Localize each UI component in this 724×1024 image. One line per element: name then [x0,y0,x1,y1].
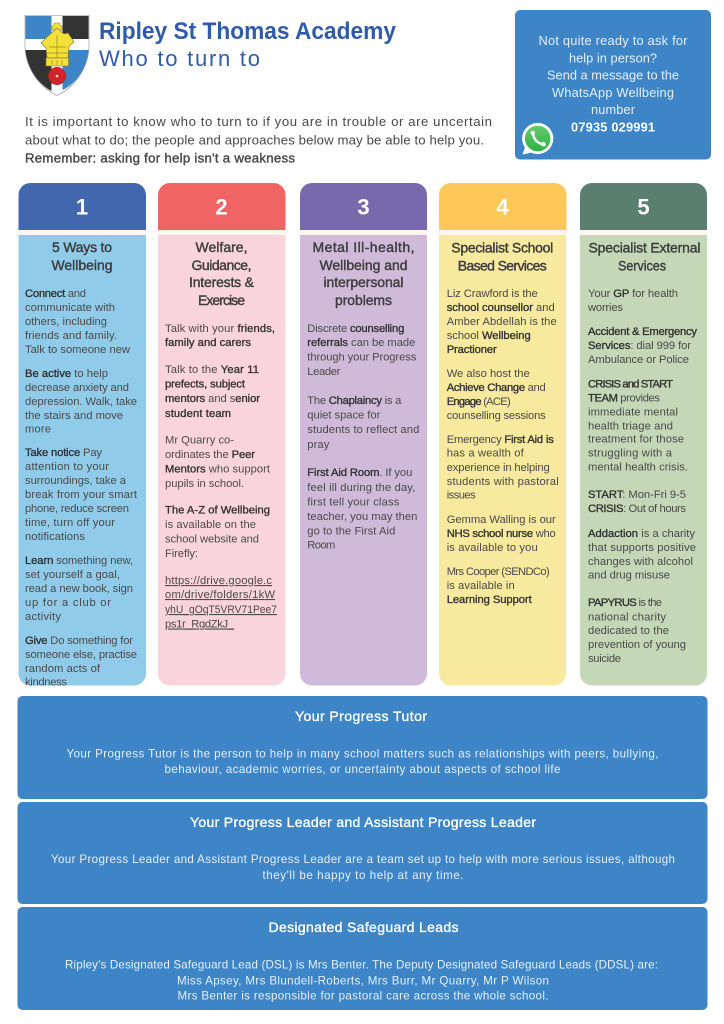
panel: Designated Safeguard Leads: Ripley's Designated Safeguard Lead (DSL) is Mrs Benter. The Deputy Designated Safeguard Leads (DDSL) are: [65,958,658,972]
panel: Your Progress Leader and Assistant Progress Leader: Your Progress Leader and Assistant Progress Leader are a team set up to help with more serious issues, although [51,853,675,866]
panel: column 4: Emergency First Aid is [447,434,554,446]
panel: column 4: NHS school nurse who [447,528,556,540]
panel: column 2 [158,183,286,686]
panel: column 5: and drug misuse [588,570,670,582]
panel: column 1: break from your smart [25,489,138,501]
panel: column 3: interpersonal [324,274,404,290]
panel: column 1: communicate with [25,302,115,314]
panel: column 4: We also host the [447,368,530,380]
panel: Your Progress Tutor [18,696,708,799]
icon: WhatsApp [522,123,553,154]
panel: column 1: decrease anxiety and [25,382,129,394]
panel: column 1: surroundings, take a [25,475,127,487]
panel: column 2: mentors and senior [165,393,260,405]
panel: column 2: Talk with your friends, [165,323,275,335]
panel: column 1: activity [25,611,61,623]
panel: column 3: The Chaplaincy is a [307,395,402,407]
panel: column 5: suicide [588,653,621,665]
panel: column 4: issues [447,490,476,502]
panel: column 2: Welfare, [196,239,248,255]
panel: column 5: immediate mental [588,406,678,418]
panel: column 1: up for a club or [25,597,111,609]
panel: column 4: experience in helping [447,462,550,474]
panel: column 5: PAPYRUS is the [588,597,662,609]
panel: column 3: 3 [357,194,370,220]
panel: column 3: students to reflect and [307,424,419,436]
panel: column 3: feel ill during the day, [307,482,415,494]
panel: column 3: First Aid Room. If you [307,467,412,479]
panel: Your Progress Tutor: behaviour, academic worries, or uncertainty about aspects of school life [164,763,560,776]
panel: column 4: Practioner [447,344,497,356]
panel: Your Progress Tutor: Your Progress Tutor is the person to help in many school matters such as relationships with peers, bullying, [66,748,658,760]
panel: column 2: ordinates the Peer [165,449,255,461]
panel: Designated Safeguard Leads [18,907,708,1010]
panel: column 2: Interests & [189,274,255,290]
title [99,18,397,71]
panel: column 3: first tell your class [307,496,400,508]
panel: column 2: Mr Quarry co- [165,434,234,446]
panel: column 4: has a wealth of [447,448,525,460]
panel: column 1: friends and family. [25,330,117,342]
panel: column 2: student team [165,408,231,420]
panel: WhatsApp callout [515,10,711,160]
panel: column 1: 1 [76,194,88,220]
panel: column 5: worries [587,302,623,314]
panel: column 5: TEAM provides [588,392,660,404]
panel: column 4: is available to you [447,542,538,554]
panel: column 3: Leader [307,366,341,378]
panel: column 1: Talk to someone new [25,344,131,356]
panel: column 4: Gemma Walling is our [447,514,556,526]
panel: column 2: prefects, subject [165,378,246,390]
panel: column 5: mental health crisis. [588,462,688,474]
panel: column 2: yhU_gOqT5VRV71Pee7 [165,604,277,616]
panel: column 5: dedicated to the [588,625,669,637]
panel: Your Progress Leader and Assistant Progress Leader [18,802,708,904]
panel: column 1: Connect and [25,288,86,300]
icon: school crest shield [25,16,89,96]
panel: column 1: attention to your [25,461,109,473]
panel: Designated Safeguard Leads: Designated Safeguard Leads [268,919,458,935]
panel: column 4: Amber Abdellah is the [447,316,557,328]
panel: column 1: Give Do something for [25,635,133,647]
panel: column 4: school counsellor and [447,302,555,314]
panel: column 1: Wellbeing [52,257,112,273]
panel: column 1: Learn something new, [25,555,133,567]
panel: column 1 [18,183,146,688]
title: Ripley St Thomas Academy [99,18,397,45]
panel: column 4: Achieve Change and [447,382,546,394]
panel: column 4: Specialist School [451,240,553,256]
panel: column 4: 4 [496,194,509,220]
panel: column 3: pray [307,439,330,451]
panel: column 5: health triage and [588,420,673,432]
panel: column 3: teacher, you may then [307,511,417,523]
panel: column 2: Guidance, [192,257,252,273]
panel: column 4: Liz Crawford is the [447,288,538,300]
panel: Your Progress Tutor: Your Progress Tutor [295,708,427,724]
panel: column 1: more [25,424,51,436]
panel: column 2: Firefly: [165,548,198,560]
panel: column 5: Services: dial 999 for [588,340,691,352]
panel: column 3: Discrete counselling [307,323,404,335]
panel: column 4: students with pastoral [447,476,559,488]
panel: column 3: Metal Ill-health, [312,239,414,255]
panel: column 5: Your GP for health [588,288,678,300]
panel: column 5: Addaction is a charity [588,528,695,540]
panel: column 2: om/drive/folders/1kW [165,589,275,601]
panel: column 2: Talk to the Year 11 [165,364,259,376]
panel: column 2: Exercise [198,292,245,308]
panel: column 5: Ambulance or Police [588,354,689,366]
panel: column 3: Wellbeing and [320,257,408,273]
panel: column 2: https://drive.google.c [165,575,272,587]
panel: Your Progress Leader and Assistant Progress Leader: they'll be happy to help at any time. [262,869,464,882]
panel: WhatsApp callout: help in person? [569,50,657,66]
panel: column 3: through your Progress [307,352,417,364]
panel: WhatsApp callout: Send a message to the [547,68,679,82]
panel: column 2: school website and [165,534,259,546]
panel: column 5: struggling with a [588,448,673,460]
panel: column 1: 5 Ways to [52,239,112,255]
panel: column 5: treatment for those [588,434,684,446]
panel: column 1: Be active to help [25,368,108,380]
title: Who to turn to [99,46,260,71]
panel: column 5: prevention of young [588,639,686,651]
panel: column 4: Learning Support [447,594,533,606]
panel: column 1: notifications [25,531,85,543]
panel: column 1: time, turn off your [25,517,115,529]
panel: Your Progress Leader and Assistant Progress Leader: Your Progress Leader and Assistant Progress Leader [190,814,536,830]
panel: column 5: Services [618,258,666,274]
panel: column 4 [439,183,566,686]
panel: column 2: The A-Z of Wellbeing [165,504,270,516]
panel: WhatsApp callout: WhatsApp Wellbeing [552,85,674,100]
intro text block: Remember: asking for help isn't a weakness [25,150,295,166]
panel: column 1: depression. Walk, take [25,396,137,408]
intro text block [25,114,492,166]
panel: column 1: random acts of [25,663,101,675]
panel: column 2: is available on the [165,519,256,531]
panel: column 5: CRISIS and START [588,378,673,390]
panel: column 5: START: Mon-Fri 9-5 [588,489,686,501]
panel: column 4: school Wellbeing [447,330,531,342]
panel: Designated Safeguard Leads: Mrs Benter is responsible for pastoral care across the whole school. [178,990,548,1002]
panel: column 1: kindness [25,676,67,688]
panel: column 5 [580,183,707,686]
panel: column 4: Mrs Cooper (SENDCo) [447,566,550,578]
intro text block: It is important to know who to turn to if you are in trouble or are uncertain [25,114,492,129]
panel: column 3: go to the First Aid [307,526,395,538]
panel: column 2: pupils in school. [165,478,244,490]
panel: column 2: ps1r_RgdZkJ_ [165,618,235,630]
panel: column 3: referrals can be made [307,337,415,349]
panel: column 1: read a new book, sign [25,583,133,595]
panel: Designated Safeguard Leads: Miss Apsey, Mrs Blundell-Roberts, Mrs Burr, Mr Quarry, Mr P Wilson [177,974,549,988]
panel: column 1: someone else, practise [25,649,137,661]
panel: column 4: Based Services [458,258,547,274]
panel: WhatsApp callout: number [591,102,636,117]
panel: column 5: Specialist External [588,240,700,256]
panel: column 4: is available in [447,580,515,592]
panel: column 2: Mentors who support [165,464,271,476]
panel: WhatsApp callout: 07935 029991 [571,120,655,134]
panel: column 5: 5 [637,194,650,220]
panel: WhatsApp callout: Not quite ready to ask for [538,33,688,48]
panel: column 2: family and carers [165,337,251,349]
panel: column 2: 2 [215,194,228,220]
panel: column 3 [300,183,427,686]
panel: column 1: phone, reduce screen [25,503,129,515]
panel: column 3: Room [307,540,335,552]
panel: column 1: Take notice Pay [25,447,102,459]
panel: column 1: others, including [25,316,107,328]
panel: column 5: that supports positive [588,542,696,554]
panel: column 3: quiet space for [307,410,381,422]
panel: column 1: the stairs and move [25,410,123,422]
intro text block: about what to do; the people and approaches below may be able to help you. [25,132,484,148]
panel: column 5: national charity [588,612,666,624]
panel: column 5: CRISIS: Out of hours [588,503,686,515]
panel: column 5: changes with alcohol [588,556,693,568]
panel: column 4: Engage (ACE) [447,396,511,408]
panel: column 5: Accident & Emergency [588,326,697,338]
panel: column 1: set yourself a goal, [25,569,120,581]
panel: column 3: problems [335,292,392,308]
panel: column 4: counselling sessions [447,410,546,422]
